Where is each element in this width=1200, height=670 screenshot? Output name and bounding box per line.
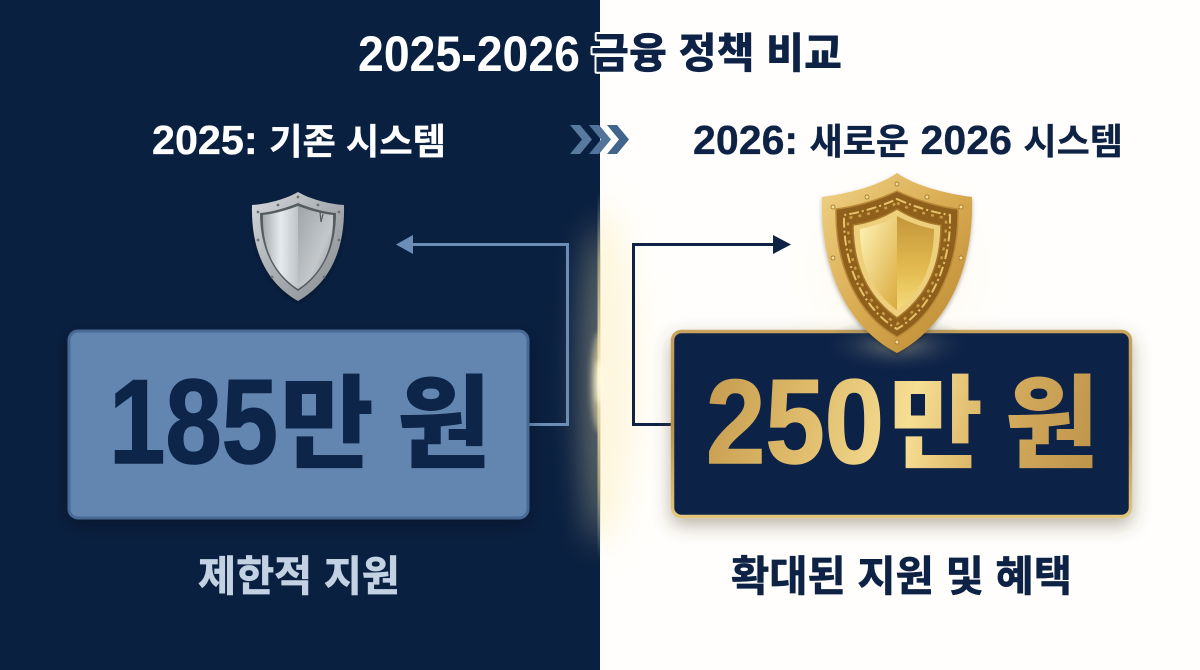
heading: 2025 existing system: 2025: 기존 시스템	[152, 117, 446, 163]
value: 250만 원: 원	[1005, 343, 1099, 490]
panel: 2025 dark background	[0, 0, 600, 670]
title: 금융 정책 비교	[591, 20, 842, 81]
panel: 250만 원 value box	[672, 317, 1130, 516]
title: 2025-2026	[358, 26, 580, 82]
panel: 2026 light background	[600, 0, 1200, 670]
value: 250만 원	[706, 343, 1099, 490]
arrow: left loop to silver shield	[396, 235, 568, 424]
icon: triple chevron arrow	[570, 125, 629, 154]
value: 250만 원: 250	[706, 355, 884, 489]
title	[358, 20, 842, 82]
value: 185만 원: 만	[280, 343, 374, 490]
panel: 185만 원 value box	[69, 331, 528, 518]
value: 185만 원: 185	[109, 355, 278, 489]
center glow	[564, 190, 636, 560]
caption: expanded support and benefits: 확대된 지원 및 혜택	[731, 543, 1072, 604]
caption: limited support: 제한적 지원	[198, 543, 400, 604]
arrow: right loop to gold shield	[634, 235, 791, 424]
value: 185만 원: 원	[397, 343, 491, 490]
value: 250만 원: 만	[889, 343, 983, 490]
heading: 2026 new system: 2026: 새로운 2026 시스템	[693, 117, 1123, 163]
halo behind gold shield	[772, 145, 1022, 395]
value: 185만 원	[109, 343, 491, 490]
icon: gold shield	[822, 173, 972, 353]
icon: silver shield	[252, 192, 344, 301]
